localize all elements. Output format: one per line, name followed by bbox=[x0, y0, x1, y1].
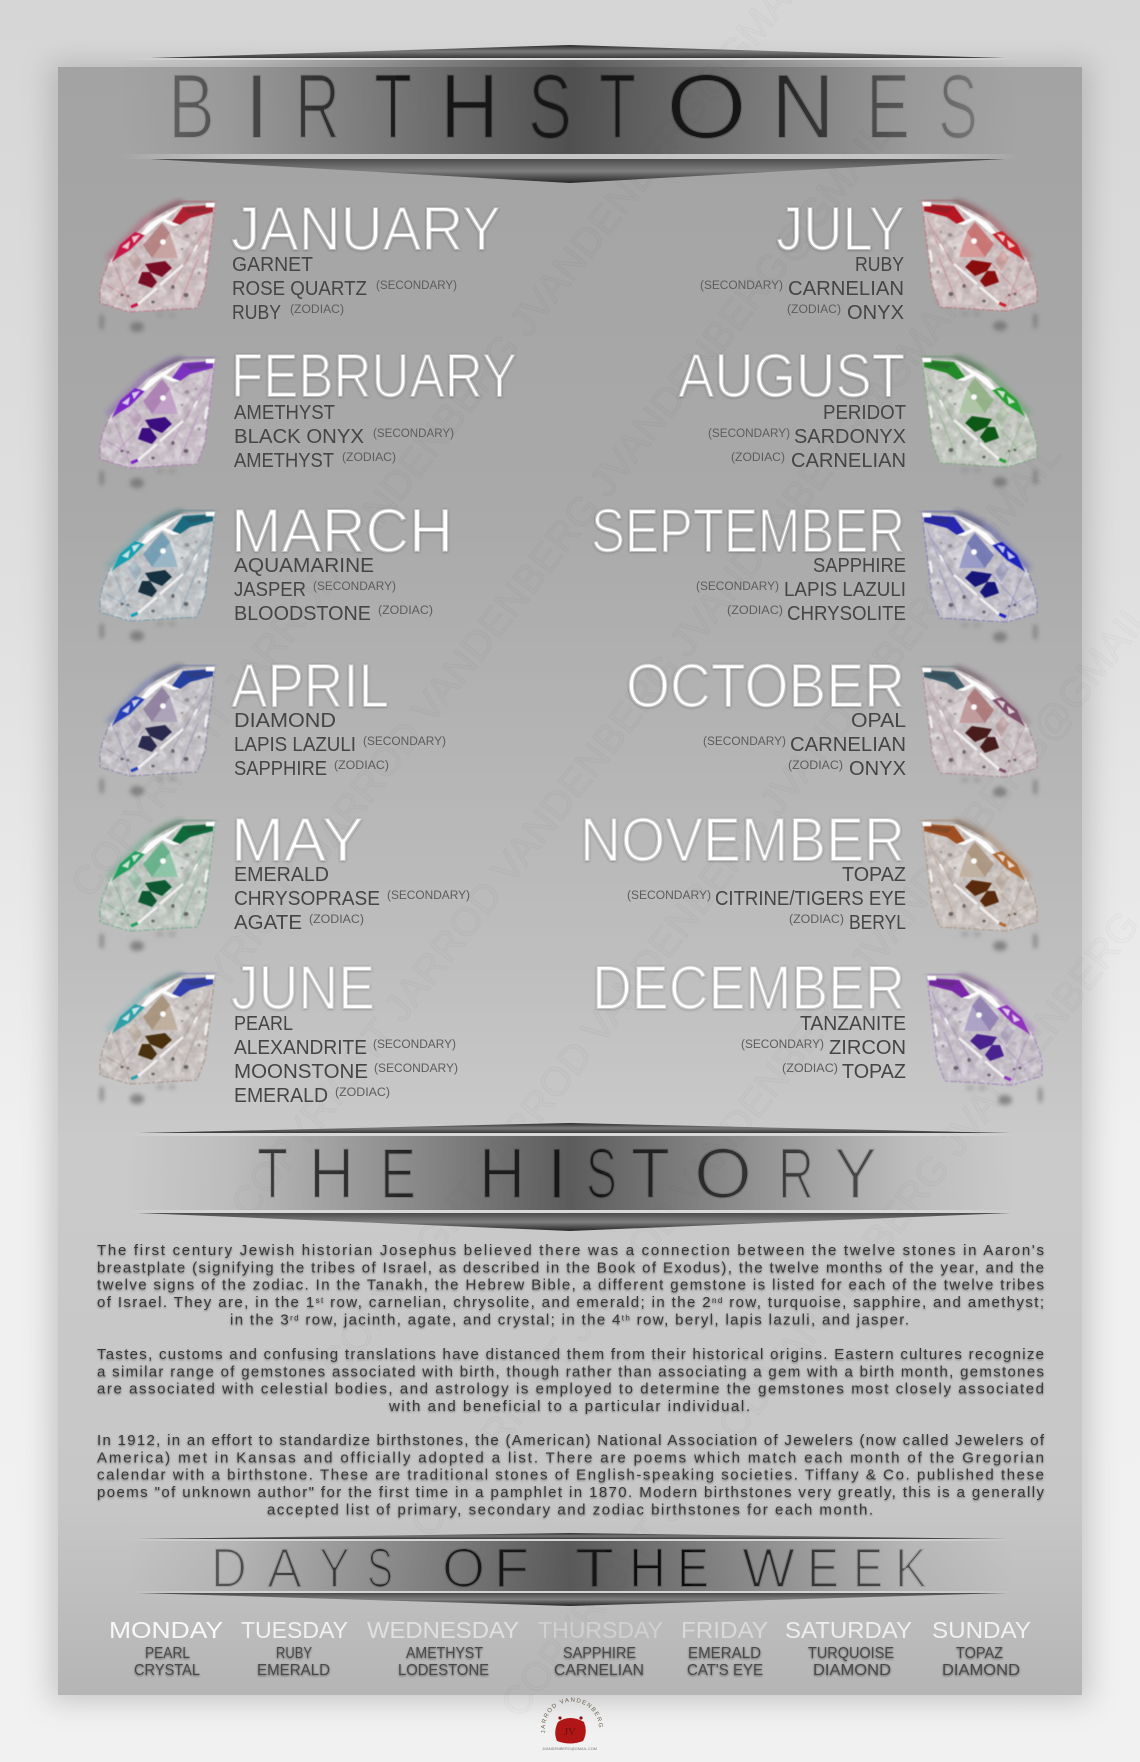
stones: BERYL bbox=[849, 912, 906, 934]
stones: (SECONDARY) bbox=[313, 581, 396, 593]
icon: April gem bbox=[100, 665, 215, 796]
stones: (SECONDARY) bbox=[374, 1063, 458, 1075]
stones: OPAL bbox=[851, 710, 906, 732]
panel: January bbox=[100, 195, 501, 332]
stones: AQUAMARINE bbox=[234, 555, 374, 577]
title: S bbox=[938, 56, 978, 158]
stones bbox=[234, 555, 433, 625]
month heading: MAY bbox=[231, 806, 364, 875]
title: T bbox=[599, 56, 636, 158]
logo: JVANDENBERG@GMAIL.COM bbox=[542, 1747, 597, 1751]
Saturday: SATURDAY bbox=[785, 1617, 912, 1643]
stones: JASPER bbox=[234, 579, 306, 601]
title banner bbox=[120, 45, 1020, 183]
stones: ONYX bbox=[849, 758, 906, 780]
heading: K bbox=[895, 1536, 927, 1599]
stones: RUBY bbox=[232, 302, 281, 324]
logo: JV bbox=[564, 1726, 576, 1738]
stones: GARNET bbox=[232, 254, 313, 276]
stones: EMERALD bbox=[234, 864, 329, 886]
stones: BLACK ONYX bbox=[234, 426, 364, 448]
icon: June gem bbox=[100, 973, 215, 1104]
stones: (SECONDARY) bbox=[708, 428, 790, 440]
stones: (SECONDARY) bbox=[376, 280, 457, 292]
stones: CARNELIAN bbox=[788, 278, 904, 300]
panel: September bbox=[591, 497, 1037, 642]
stones bbox=[708, 402, 906, 472]
title: E bbox=[866, 56, 910, 158]
stones: CHRYSOPRASE bbox=[234, 888, 380, 910]
icon: October gem bbox=[922, 666, 1037, 797]
icon: March gem bbox=[100, 510, 215, 641]
Saturday: DIAMOND bbox=[813, 1662, 891, 1679]
title: S bbox=[528, 56, 572, 158]
Thursday bbox=[538, 1617, 663, 1679]
Friday: EMERALD bbox=[688, 1645, 761, 1662]
heading: W bbox=[742, 1536, 795, 1599]
stones: (ZODIAC) bbox=[731, 452, 785, 464]
Wednesday: AMETHYST bbox=[406, 1645, 483, 1662]
paragraph 2: are associated with celestial bodies, and astrology is employed to determine the gemstones most closely associated bbox=[97, 1381, 1044, 1398]
stones: (SECONDARY) bbox=[387, 890, 470, 902]
panel: August bbox=[678, 342, 1037, 487]
paragraph 3: calendar with a birthstone. These are traditional stones of English-speaking societies. Tiffany & Co. published these bbox=[97, 1467, 1044, 1484]
paragraph 1: row, jacinth, agate, and crystal; in the 4 bbox=[300, 1311, 620, 1328]
stones: (ZODIAC) bbox=[378, 605, 433, 617]
Thursday: CARNELIAN bbox=[554, 1662, 644, 1679]
panel: November bbox=[580, 806, 1037, 951]
paragraph 1: st bbox=[316, 1296, 324, 1305]
Sunday: SUNDAY bbox=[932, 1617, 1031, 1643]
paragraph 1: rd bbox=[290, 1313, 299, 1322]
stones: ONYX bbox=[847, 302, 904, 324]
stones: TANZANITE bbox=[800, 1013, 906, 1035]
heading: D bbox=[211, 1536, 247, 1599]
logo: JARROD VANDENBERG bbox=[540, 1698, 603, 1734]
history banner bbox=[125, 1123, 1015, 1231]
paragraph 3: poems "of unknown author" for the first time in a pamphlet in 1870. Modern birthstones very greatly, this is a generally bbox=[97, 1484, 1045, 1501]
month heading: JUNE bbox=[231, 954, 375, 1023]
panel: March bbox=[100, 497, 453, 641]
paragraph 1: row, beryl, lapis lazuli, and jasper. bbox=[631, 1311, 909, 1328]
heading: F bbox=[494, 1536, 529, 1599]
heading: E bbox=[853, 1536, 883, 1599]
stones: (SECONDARY) bbox=[696, 581, 779, 593]
Monday: CRYSTAL bbox=[134, 1662, 200, 1679]
Sunday bbox=[932, 1617, 1031, 1679]
Tuesday: TUESDAY bbox=[241, 1617, 348, 1643]
month heading: JANUARY bbox=[231, 195, 501, 264]
paragraph 1: breastplate (signifying the tribes of Israel, as described in the Book of Exodus), the twelve months of the year, and the bbox=[97, 1259, 1044, 1276]
month heading: JULY bbox=[776, 195, 905, 264]
month heading: MARCH bbox=[231, 497, 453, 566]
heading: E bbox=[807, 1536, 839, 1599]
title: R bbox=[295, 56, 340, 158]
paragraph 1: in the 3 bbox=[230, 1311, 289, 1328]
month heading: SEPTEMBER bbox=[591, 497, 905, 566]
stones: LAPIS LAZULI bbox=[234, 734, 356, 756]
paragraph 1 bbox=[97, 1242, 1044, 1328]
watermark: COPYRIGHT JARROD VANDENBERG JVANDENBERG@GMAIL bbox=[312, 433, 1070, 1386]
title: N bbox=[771, 56, 835, 158]
stones: (ZODIAC) bbox=[342, 452, 396, 464]
Monday: MONDAY bbox=[109, 1617, 223, 1643]
stones bbox=[234, 402, 454, 472]
stones: (SECONDARY) bbox=[363, 736, 446, 748]
heading: S bbox=[367, 1536, 393, 1599]
stones: (ZODIAC) bbox=[727, 605, 783, 617]
stones: TOPAZ bbox=[842, 864, 906, 886]
stones bbox=[234, 864, 470, 934]
Sunday: TOPAZ bbox=[956, 1645, 1003, 1662]
stones: CHRYSOLITE bbox=[787, 603, 906, 625]
paragraph 1: of Israel. They are, in the 1 bbox=[97, 1294, 314, 1311]
heading: I bbox=[547, 1135, 567, 1214]
Friday: CAT'S EYE bbox=[687, 1662, 763, 1679]
days banner bbox=[125, 1533, 1015, 1606]
stones bbox=[234, 710, 446, 780]
watermark: COPYRIGHT JARROD VANDENBERG JVANDENBERG@GMAIL bbox=[222, 273, 980, 1226]
month heading: APRIL bbox=[231, 652, 389, 721]
stones: (SECONDARY) bbox=[703, 736, 786, 748]
icon: January gem bbox=[100, 201, 215, 332]
Wednesday bbox=[367, 1617, 519, 1679]
title: O bbox=[666, 56, 747, 158]
stones: RUBY bbox=[855, 254, 904, 276]
heading: S bbox=[586, 1135, 617, 1214]
heading: T bbox=[257, 1135, 288, 1214]
paragraph 1: nd bbox=[712, 1296, 722, 1305]
stones bbox=[741, 1013, 906, 1083]
stones: (SECONDARY) bbox=[741, 1039, 824, 1051]
stones: AGATE bbox=[234, 912, 302, 934]
heading: H bbox=[309, 1135, 354, 1214]
icon: July gem bbox=[922, 200, 1037, 331]
Friday: FRIDAY bbox=[681, 1617, 768, 1643]
Monday: PEARL bbox=[145, 1645, 190, 1662]
panel: July bbox=[700, 195, 1037, 331]
heading: R bbox=[778, 1135, 814, 1214]
panel: December bbox=[592, 954, 1042, 1105]
heading: A bbox=[267, 1536, 303, 1599]
panel: May bbox=[100, 806, 470, 951]
stones: (SECONDARY) bbox=[627, 890, 711, 902]
heading: H bbox=[629, 1536, 666, 1599]
paragraph 3: In 1912, in an effort to standardize birthstones, the (American) National Association of Jewelers (now called Jewelers of bbox=[97, 1432, 1045, 1449]
icon: September gem bbox=[922, 511, 1037, 642]
icon: August gem bbox=[922, 356, 1037, 487]
paragraph 1: th bbox=[622, 1313, 630, 1322]
icon: December gem bbox=[927, 974, 1042, 1105]
Sunday: DIAMOND bbox=[942, 1662, 1020, 1679]
heading: T bbox=[575, 1536, 614, 1599]
stones: EMERALD bbox=[234, 1085, 328, 1107]
stones: MOONSTONE bbox=[234, 1061, 368, 1083]
paragraph 2: Tastes, customs and confusing translations have distanced them from their historical origins. Eastern cultures recognize bbox=[97, 1346, 1044, 1363]
stones: SARDONYX bbox=[794, 426, 906, 448]
paragraph 3 bbox=[97, 1432, 1045, 1518]
stones: CARNELIAN bbox=[791, 450, 906, 472]
Thursday: SAPPHIRE bbox=[563, 1645, 636, 1662]
heading: E bbox=[677, 1536, 709, 1599]
stones: PERIDOT bbox=[823, 402, 906, 424]
stones bbox=[232, 254, 457, 324]
panel: October bbox=[626, 652, 1037, 797]
Tuesday: EMERALD bbox=[257, 1662, 330, 1679]
paragraph 3: America) met in Kansas and officially adopted a list. There are poems which match each month of the Gregorian bbox=[97, 1449, 1044, 1466]
paragraph 1: twelve signs of the zodiac. In the Tanakh, the Hebrew Bible, a different gemstone is listed for each of the twelve tribes bbox=[97, 1277, 1044, 1294]
panel: April bbox=[100, 652, 446, 796]
Wednesday: LODESTONE bbox=[398, 1662, 489, 1679]
stones: CITRINE/TIGERS EYE bbox=[715, 888, 906, 910]
stones: (ZODIAC) bbox=[782, 1063, 838, 1075]
icon: February gem bbox=[100, 357, 215, 488]
stones: AMETHYST bbox=[234, 450, 334, 472]
heading: E bbox=[380, 1135, 416, 1214]
heading: T bbox=[631, 1135, 670, 1214]
stones bbox=[703, 710, 906, 780]
title: T bbox=[374, 56, 412, 158]
stones bbox=[700, 254, 904, 324]
stones: TOPAZ bbox=[842, 1061, 906, 1083]
paragraph 1: The first century Jewish historian Josephus believed there was a connection between the twelve stones in Aaron's bbox=[97, 1242, 1044, 1259]
month heading: FEBRUARY bbox=[231, 342, 517, 411]
paragraph 2 bbox=[97, 1346, 1044, 1415]
month heading: OCTOBER bbox=[626, 652, 905, 721]
Tuesday: RUBY bbox=[276, 1645, 312, 1662]
heading: Y bbox=[319, 1536, 350, 1599]
paragraph 1: row, turquoise, sapphire, and amethyst; bbox=[724, 1294, 1044, 1311]
stones: ZIRCON bbox=[829, 1037, 906, 1059]
stones: (ZODIAC) bbox=[309, 914, 364, 926]
stones bbox=[234, 1013, 458, 1107]
stones: (SECONDARY) bbox=[700, 280, 783, 292]
stones: (ZODIAC) bbox=[788, 760, 843, 772]
stones: (SECONDARY) bbox=[373, 1039, 456, 1051]
icon: May gem bbox=[100, 820, 215, 951]
paragraph 3: accepted list of primary, secondary and zodiac birthstones for each month. bbox=[267, 1501, 873, 1518]
watermark: COPYRIGHT JARROD VANDENBERG JVANDENBERG bbox=[492, 903, 1140, 1726]
history text bbox=[97, 1242, 1045, 1518]
stones: SAPPHIRE bbox=[813, 555, 906, 577]
month heading: AUGUST bbox=[678, 342, 905, 411]
paragraph 2: with and beneficial to a particular individual. bbox=[388, 1398, 750, 1415]
stones: (ZODIAC) bbox=[334, 760, 389, 772]
Friday bbox=[681, 1617, 768, 1679]
month heading: NOVEMBER bbox=[580, 806, 905, 875]
stones: BLOODSTONE bbox=[234, 603, 371, 625]
heading: Y bbox=[834, 1135, 877, 1214]
stones: (ZODIAC) bbox=[335, 1087, 390, 1099]
stones: ALEXANDRITE bbox=[234, 1037, 367, 1059]
stones: PEARL bbox=[234, 1013, 293, 1035]
stones: DIAMOND bbox=[234, 710, 336, 732]
stones: SAPPHIRE bbox=[234, 758, 327, 780]
month heading: DECEMBER bbox=[592, 954, 905, 1023]
panel: June bbox=[100, 954, 458, 1107]
panel: February bbox=[100, 342, 517, 488]
title: H bbox=[440, 56, 499, 158]
stones: LAPIS LAZULI bbox=[784, 579, 906, 601]
heading: H bbox=[479, 1135, 525, 1214]
stones: (SECONDARY) bbox=[373, 428, 454, 440]
paragraph 2: a similar range of gemstones associated with birth, though rather than associating a gem with a birth month, gemstones bbox=[97, 1363, 1044, 1380]
stones: (ZODIAC) bbox=[787, 304, 841, 316]
Saturday bbox=[785, 1617, 912, 1679]
stones: (ZODIAC) bbox=[290, 304, 344, 316]
Tuesday bbox=[241, 1617, 348, 1679]
stones: (ZODIAC) bbox=[789, 914, 844, 926]
title: B bbox=[168, 56, 215, 158]
heading: O bbox=[442, 1536, 485, 1599]
days of the week table bbox=[109, 1617, 1031, 1679]
paragraph 1: row, carnelian, chrysolite, and emerald; in the 2 bbox=[325, 1294, 711, 1311]
Thursday: THURSDAY bbox=[538, 1617, 663, 1643]
icon: November gem bbox=[922, 820, 1037, 951]
logo bbox=[540, 1698, 603, 1751]
stones: ROSE QUARTZ bbox=[232, 278, 367, 300]
stones: AMETHYST bbox=[234, 402, 335, 424]
Saturday: TURQUOISE bbox=[808, 1645, 894, 1662]
Monday bbox=[109, 1617, 223, 1679]
heading: O bbox=[694, 1135, 752, 1214]
title: I bbox=[244, 56, 270, 158]
Wednesday: WEDNESDAY bbox=[367, 1617, 519, 1643]
stones bbox=[696, 555, 906, 625]
stones bbox=[627, 864, 906, 934]
watermark: COPYRIGHT JARROD VANDENBERG JVANDENBERG@GMAIL bbox=[142, 113, 900, 1066]
watermark: COPYRIGHT JARROD VANDENBERG JVANDENBERG@GMAIL bbox=[402, 593, 1140, 1546]
stones: CARNELIAN bbox=[790, 734, 906, 756]
